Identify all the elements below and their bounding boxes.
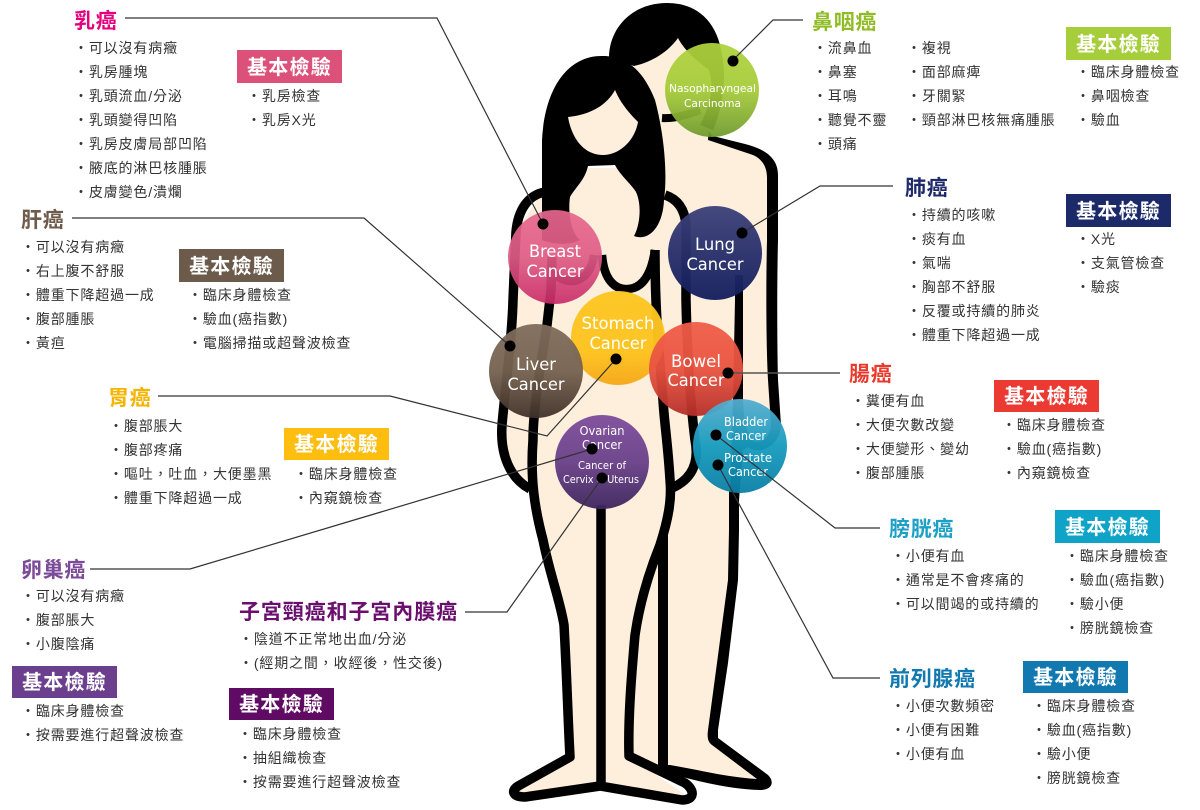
heading: breast cancer: 乳癌 bbox=[74, 10, 117, 33]
symptoms: prostate cancer bbox=[891, 698, 995, 762]
tests: cervix and uterus cancer bbox=[238, 726, 401, 790]
badge: basic tests bbox=[12, 666, 117, 698]
badge: basic tests bbox=[229, 688, 334, 720]
circle: ovarian and cervix cancer: Cancer of bbox=[578, 460, 626, 472]
tests: prostate cancer: ・驗血(癌指數) bbox=[1032, 722, 1132, 738]
circle: lung cancer: Lung bbox=[695, 235, 735, 255]
circle: bowel cancer: Bowel bbox=[671, 352, 721, 372]
heading: bowel cancer: 腸癌 bbox=[849, 363, 892, 386]
leader: bowel bbox=[722, 368, 840, 378]
symptoms: cervix and uterus cancer: ・陰道不正常地出血/分泌 bbox=[239, 631, 407, 647]
symptoms: liver cancer: ・右上腹不舒服 bbox=[21, 263, 125, 279]
circle: bladder and prostate cancer: Prostate bbox=[724, 451, 772, 465]
badge: basic tests bbox=[179, 249, 284, 282]
symptoms: stomach cancer: ・嘔吐，吐血，大便墨黑 bbox=[109, 466, 272, 482]
tests: breast cancer: ・乳房X光 bbox=[247, 112, 317, 128]
panel: liver cancer bbox=[21, 208, 351, 351]
leader: breast bbox=[125, 18, 548, 230]
symptoms: bowel cancer: ・糞便有血 bbox=[851, 393, 925, 409]
circle: liver cancer: Liver bbox=[516, 355, 556, 375]
badge: basic tests bbox=[284, 428, 389, 460]
symptoms: prostate cancer: ・小便次數頻密 bbox=[891, 698, 995, 714]
symptoms: ovarian cancer: ・小腹陰痛 bbox=[21, 636, 95, 652]
tests: bowel cancer: ・臨床身體檢查 bbox=[1002, 417, 1106, 433]
tests: bladder cancer bbox=[1065, 548, 1169, 636]
tests: cervix and uterus cancer: ・按需要進行超聲波檢查 bbox=[238, 774, 401, 790]
leader: lung bbox=[736, 186, 893, 238]
tests: liver cancer: ・電腦掃描或超聲波檢查 bbox=[188, 335, 351, 351]
front figure bbox=[502, 56, 696, 800]
badge: basic tests: 基本檢驗 bbox=[1076, 34, 1161, 56]
back figure bbox=[609, 3, 781, 790]
circle: bowel cancer bbox=[649, 322, 743, 416]
heading: cervix and uterus cancer: 子宮頸癌和子宮內膜癌 bbox=[239, 601, 458, 624]
badge: basic tests: 基本檢驗 bbox=[247, 57, 332, 79]
panel: nasopharyngeal carcinoma bbox=[812, 10, 1180, 152]
symptoms column one: ・耳鳴 bbox=[813, 88, 858, 104]
symptoms: breast cancer: ・乳房腫塊 bbox=[74, 64, 148, 80]
leader: nasopharyngeal bbox=[728, 20, 803, 66]
symptoms column two: ・面部麻痺 bbox=[907, 64, 981, 80]
symptoms: lung cancer: ・反覆或持續的肺炎 bbox=[907, 303, 1041, 319]
badge: basic tests: 基本檢驗 bbox=[1076, 201, 1161, 223]
heading: liver cancer: 肝癌 bbox=[21, 209, 64, 232]
tests: nasopharyngeal carcinoma: ・鼻咽檢查 bbox=[1076, 88, 1150, 104]
tests: nasopharyngeal carcinoma: ・驗血 bbox=[1076, 112, 1121, 128]
badge: basic tests bbox=[1066, 194, 1171, 227]
leader: cervix and uterus bbox=[465, 472, 608, 612]
tests: prostate cancer: ・膀胱鏡檢查 bbox=[1032, 770, 1121, 786]
heading: ovarian cancer: 卵巢癌 bbox=[21, 559, 86, 582]
tests: breast cancer: ・乳房檢查 bbox=[247, 88, 321, 104]
circle: bladder and prostate cancer bbox=[693, 399, 787, 493]
badge: basic tests: 基本檢驗 bbox=[1004, 386, 1089, 408]
badge: basic tests: 基本檢驗 bbox=[1033, 667, 1118, 689]
symptoms: bowel cancer: ・大便次數改變 bbox=[851, 417, 955, 433]
symptoms: ovarian cancer bbox=[21, 588, 125, 652]
symptoms: bladder cancer: ・小便有血 bbox=[891, 548, 965, 564]
tests: bowel cancer: ・驗血(癌指數) bbox=[1002, 441, 1102, 457]
circle: stomach cancer bbox=[571, 291, 665, 385]
circle: ovarian and cervix cancer bbox=[555, 415, 649, 509]
symptoms: ovarian cancer: ・腹部脹大 bbox=[21, 612, 95, 628]
symptoms column one: ・流鼻血 bbox=[813, 40, 872, 56]
symptoms column one: ・鼻塞 bbox=[813, 64, 858, 80]
symptoms: liver cancer: ・腹部腫脹 bbox=[21, 311, 95, 327]
tests: stomach cancer: ・內窺鏡檢查 bbox=[294, 490, 383, 506]
symptoms: breast cancer: ・皮膚變色/潰爛 bbox=[74, 184, 183, 200]
circle: ovarian and cervix cancer: Cancer bbox=[582, 438, 622, 452]
symptoms: stomach cancer: ・腹部疼痛 bbox=[109, 442, 183, 458]
badge: basic tests bbox=[237, 50, 342, 83]
circle: breast cancer: Breast bbox=[529, 242, 581, 262]
symptoms: liver cancer bbox=[21, 239, 155, 351]
symptoms: breast cancer: ・腋底的淋巴核腫脹 bbox=[74, 160, 208, 176]
circle: breast cancer bbox=[508, 210, 602, 304]
symptoms: stomach cancer: ・體重下降超過一成 bbox=[109, 490, 243, 506]
badge: basic tests bbox=[1055, 510, 1160, 543]
symptoms: ovarian cancer: ・可以沒有病癥 bbox=[21, 588, 125, 604]
tests: lung cancer: ・驗痰 bbox=[1076, 279, 1121, 295]
tests: lung cancer bbox=[1076, 231, 1165, 295]
symptoms: cervix and uterus cancer bbox=[239, 631, 443, 671]
tests: bladder cancer: ・膀胱鏡檢查 bbox=[1065, 620, 1154, 636]
leader: ovarian bbox=[90, 444, 598, 569]
symptoms: breast cancer bbox=[74, 40, 208, 200]
tests: lung cancer: ・支氣管檢查 bbox=[1076, 255, 1165, 271]
symptoms: liver cancer: ・黃疸 bbox=[21, 335, 66, 351]
symptoms: bowel cancer: ・腹部腫脹 bbox=[851, 465, 925, 481]
leader: stomach bbox=[158, 354, 622, 436]
tests: ovarian cancer: ・臨床身體檢查 bbox=[21, 703, 125, 719]
panel: ovarian cancer bbox=[12, 558, 184, 743]
symptoms: breast cancer: ・乳頭變得凹陷 bbox=[74, 112, 178, 128]
tests: nasopharyngeal carcinoma bbox=[1076, 64, 1180, 128]
heading: prostate cancer: 前列腺癌 bbox=[889, 668, 976, 691]
symptoms: cervix and uterus cancer: ・(經期之間，收經後，性交後) bbox=[239, 655, 443, 671]
leader: liver bbox=[72, 218, 516, 352]
symptoms: bowel cancer bbox=[851, 393, 970, 481]
symptoms: stomach cancer: ・腹部脹大 bbox=[109, 418, 183, 434]
circle: liver cancer bbox=[489, 324, 583, 418]
symptoms: liver cancer: ・可以沒有病癥 bbox=[21, 239, 125, 255]
badge: basic tests: 基本檢驗 bbox=[189, 256, 274, 278]
symptoms: bladder cancer bbox=[891, 548, 1040, 612]
symptoms column one bbox=[813, 40, 887, 152]
symptoms column two: ・複視 bbox=[907, 40, 952, 56]
symptoms: bladder cancer: ・通常是不會疼痛的 bbox=[891, 572, 1025, 588]
symptoms: liver cancer: ・體重下降超過一成 bbox=[21, 287, 155, 303]
badge: basic tests: 基本檢驗 bbox=[239, 694, 324, 716]
tests: liver cancer bbox=[188, 287, 351, 351]
badge: basic tests bbox=[994, 380, 1099, 412]
symptoms: lung cancer: ・痰有血 bbox=[907, 231, 966, 247]
panel: breast cancer bbox=[74, 10, 342, 200]
tests: ovarian cancer bbox=[21, 703, 184, 743]
tests: prostate cancer: ・臨床身體檢查 bbox=[1032, 698, 1136, 714]
tests: bladder cancer: ・驗小便 bbox=[1065, 596, 1124, 612]
panel: lung cancer bbox=[905, 176, 1171, 343]
circle: bladder and prostate cancer: Bladder bbox=[724, 415, 768, 429]
tests: liver cancer: ・驗血(癌指數) bbox=[188, 311, 288, 327]
heading: lung cancer: 肺癌 bbox=[905, 177, 948, 200]
tests: bowel cancer bbox=[1002, 417, 1106, 481]
badge: basic tests: 基本檢驗 bbox=[294, 434, 379, 456]
symptoms column two bbox=[907, 40, 1056, 128]
circle: nasopharyngeal carcinoma: Nasopharyngeal bbox=[669, 82, 756, 95]
circle: stomach cancer: Cancer bbox=[590, 334, 647, 354]
circle: lung cancer bbox=[668, 206, 762, 300]
symptoms: bowel cancer: ・大便變形、變幼 bbox=[851, 441, 970, 457]
symptoms: lung cancer: ・體重下降超過一成 bbox=[907, 327, 1041, 343]
badge: basic tests: 基本檢驗 bbox=[1065, 517, 1150, 539]
circle: bladder and prostate cancer: Cancer bbox=[728, 465, 768, 479]
circle: lung cancer: Cancer bbox=[686, 255, 744, 275]
tests: cervix and uterus cancer: ・抽組織檢查 bbox=[238, 750, 327, 766]
panel: cervix and uterus cancer bbox=[229, 600, 458, 790]
tests: stomach cancer bbox=[294, 466, 398, 506]
badge: basic tests bbox=[1066, 27, 1171, 60]
symptoms: prostate cancer: ・小便有血 bbox=[891, 746, 965, 762]
tests: prostate cancer bbox=[1032, 698, 1136, 786]
heading: bladder cancer: 膀胱癌 bbox=[889, 518, 954, 541]
tests: breast cancer bbox=[247, 88, 321, 128]
heading: stomach cancer: 胃癌 bbox=[108, 387, 151, 410]
symptoms column two: ・牙關緊 bbox=[907, 88, 966, 104]
circle: ovarian and cervix cancer: Cervix & Uterus bbox=[563, 474, 639, 486]
symptoms: lung cancer: ・氣喘 bbox=[907, 255, 952, 271]
tests: cervix and uterus cancer: ・臨床身體檢查 bbox=[238, 726, 342, 742]
badge: basic tests bbox=[1023, 661, 1128, 693]
tests: lung cancer: ・X光 bbox=[1076, 231, 1116, 247]
circle: liver cancer: Cancer bbox=[508, 375, 565, 395]
panel: bowel cancer bbox=[849, 362, 1106, 481]
panel: prostate cancer bbox=[889, 661, 1136, 786]
symptoms: lung cancer: ・胸部不舒服 bbox=[907, 279, 996, 295]
symptoms: breast cancer: ・乳頭流血/分泌 bbox=[74, 88, 183, 104]
circle: bowel cancer: Cancer bbox=[668, 371, 725, 391]
symptoms: stomach cancer bbox=[109, 418, 272, 506]
heading: nasopharyngeal carcinoma: 鼻咽癌 bbox=[812, 11, 877, 34]
panel: stomach cancer bbox=[108, 386, 398, 506]
symptoms column one: ・頭痛 bbox=[813, 136, 858, 152]
symptoms: lung cancer bbox=[907, 207, 1041, 343]
tests: bladder cancer: ・驗血(癌指數) bbox=[1065, 572, 1165, 588]
circle: ovarian and cervix cancer: Ovarian bbox=[580, 424, 624, 438]
circle: nasopharyngeal carcinoma bbox=[665, 43, 759, 137]
tests: bladder cancer: ・臨床身體檢查 bbox=[1065, 548, 1169, 564]
circle: nasopharyngeal carcinoma: Carcinoma bbox=[684, 97, 741, 110]
tests: ovarian cancer: ・按需要進行超聲波檢查 bbox=[21, 727, 184, 743]
circle: breast cancer: Cancer bbox=[526, 262, 584, 282]
symptoms column one: ・聽覺不靈 bbox=[813, 112, 887, 128]
symptoms: breast cancer: ・乳房皮膚局部凹陷 bbox=[74, 136, 208, 152]
symptoms: prostate cancer: ・小便有困難 bbox=[891, 722, 980, 738]
tests: nasopharyngeal carcinoma: ・臨床身體檢查 bbox=[1076, 64, 1180, 80]
circle: stomach cancer: Stomach bbox=[582, 314, 654, 334]
symptoms: breast cancer: ・可以沒有病癥 bbox=[74, 40, 178, 56]
symptoms: bladder cancer: ・可以間竭的或持續的 bbox=[891, 596, 1040, 612]
symptoms: lung cancer: ・持續的咳嗽 bbox=[907, 207, 996, 223]
tests: stomach cancer: ・臨床身體檢查 bbox=[294, 466, 398, 482]
badge: basic tests: 基本檢驗 bbox=[22, 672, 107, 694]
panel: bladder cancer bbox=[889, 510, 1169, 636]
leader: bladder bbox=[710, 430, 880, 528]
tests: liver cancer: ・臨床身體檢查 bbox=[188, 287, 292, 303]
circle: bladder and prostate cancer: Cancer bbox=[726, 429, 766, 443]
tests: prostate cancer: ・驗小便 bbox=[1032, 746, 1091, 762]
symptoms column two: ・頸部淋巴核無痛腫脹 bbox=[907, 112, 1056, 128]
tests: bowel cancer: ・內窺鏡檢查 bbox=[1002, 465, 1091, 481]
leader: prostate bbox=[712, 460, 880, 678]
